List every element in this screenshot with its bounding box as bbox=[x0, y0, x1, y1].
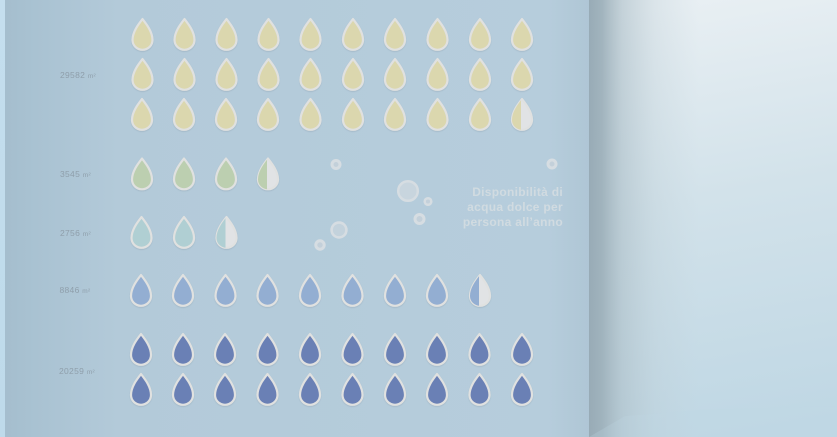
background wall bbox=[588, 0, 837, 437]
label: 2756 m²: 2756 m² bbox=[60, 228, 91, 238]
drops: 3545 m² bbox=[132, 158, 278, 189]
label: 3545 m²: 3545 m² bbox=[60, 169, 91, 179]
title: Disponibilità di acqua dolce per persona all'anno: acqua dolce per bbox=[467, 200, 563, 214]
title: Disponibilità di acqua dolce per persona all'anno: Disponibilità di bbox=[472, 185, 563, 199]
panel bbox=[0, 0, 589, 437]
drops: 2756 m² bbox=[132, 217, 236, 248]
decorative bubbles bbox=[316, 160, 556, 249]
label: 8846 m²: 8846 m² bbox=[60, 285, 91, 295]
title: Disponibilità di acqua dolce per persona all'anno: persona all’anno bbox=[463, 215, 563, 229]
label: 20259 m²: 20259 m² bbox=[59, 366, 96, 376]
drops: 8846 m² bbox=[131, 275, 490, 306]
drops: 20259 m² bbox=[131, 334, 532, 405]
drops: 29582 m² bbox=[132, 19, 532, 130]
label: 29582 m²: 29582 m² bbox=[60, 70, 97, 80]
title: Disponibilità di acqua dolce per persona all'anno bbox=[463, 185, 563, 229]
